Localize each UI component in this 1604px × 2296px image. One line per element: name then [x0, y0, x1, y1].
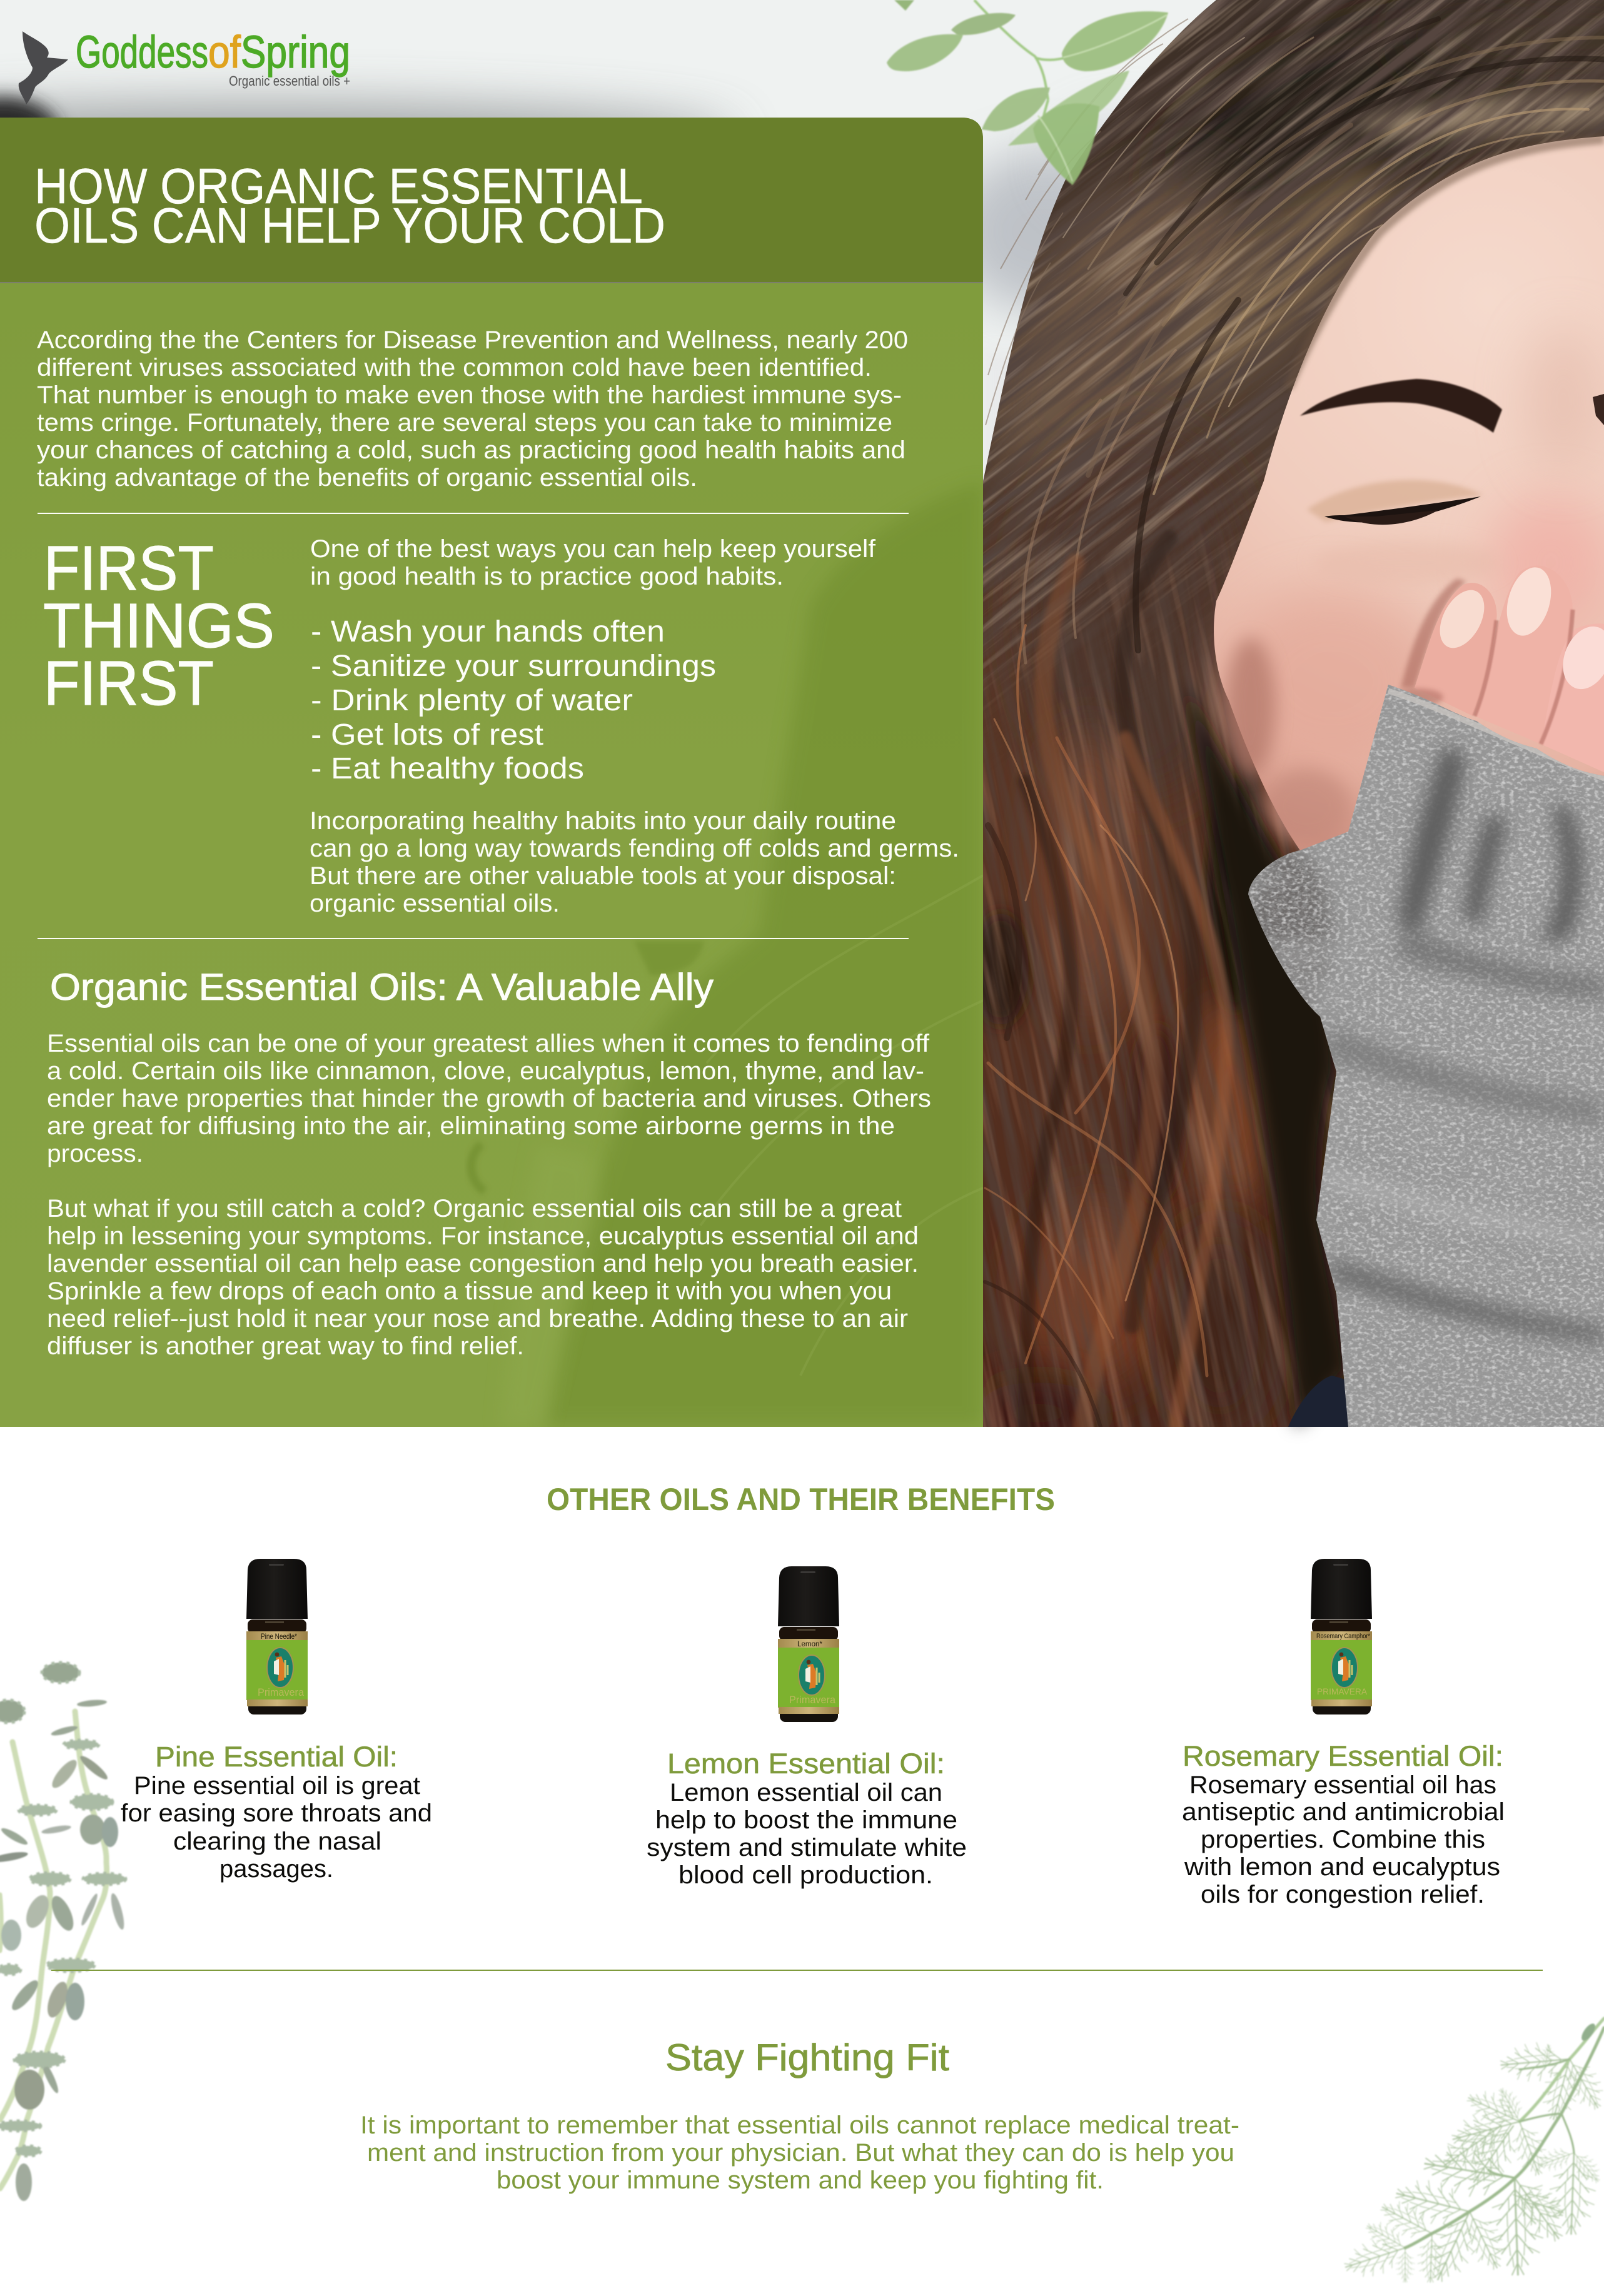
- habits closing paragraph: can go a long way towards fending off colds and germs.: [310, 835, 959, 862]
- logo: Goddess of Spring: of: [208, 28, 241, 78]
- paragraph: oils as allies: a cold. Certain oils like cinnamon, clove, eucalyptus, lemon, thyme, and lav-: [47, 1057, 924, 1085]
- intro paragraph: [37, 326, 908, 491]
- oil card: rosemary: [1182, 1559, 1505, 1908]
- logo: Goddess of Spring: [19, 28, 350, 104]
- navy top collar: [1288, 1376, 1463, 1427]
- hair flyaways at the left edge of the hair: [986, 19, 1188, 425]
- habits list: [311, 615, 716, 785]
- heading: first things first: [43, 533, 275, 718]
- panel: green article panel: [0, 118, 983, 1427]
- oil card: lemon: [647, 1566, 967, 1889]
- title: OILS CAN HELP YOUR COLD: [34, 198, 665, 253]
- habits closing paragraph: Incorporating healthy habits into your daily routine: [310, 807, 896, 835]
- closing paragraph: ment and instruction from your physician. But what they can do is help you: [367, 2139, 1234, 2167]
- lemon oil description: [647, 1779, 967, 1889]
- title: HOW ORGANIC ESSENTIAL: [34, 158, 643, 214]
- habits list: - Wash your hands often: [311, 615, 665, 648]
- paragraph: if you catch a cold: [47, 1195, 919, 1360]
- pine oil bottle: Pine Needle*: [261, 1632, 297, 1641]
- paragraph: oils as allies: ender have properties that hinder the growth of bacteria and viruses. Others: [47, 1085, 931, 1112]
- basil leaf left: [887, 34, 963, 71]
- habits list: - Eat healthy foods: [311, 752, 584, 785]
- photo: woman with sweater covering her nose: [0, 0, 1604, 1434]
- lemon oil bottle: Lemon*: [797, 1639, 822, 1648]
- face: [1214, 136, 1604, 875]
- heading: stay fighting fit: Stay Fighting Fit: [665, 2037, 949, 2078]
- dill sprig at the bottom right: [1340, 2018, 1604, 2288]
- cuff ribbing shadows: [1395, 744, 1604, 1000]
- paragraph: if you catch a cold: But what if you still catch a cold? Organic essential oils can still be a great: [47, 1195, 902, 1222]
- paragraph: oils as allies: are great for diffusing into the air, eliminating some airborne germs in the: [47, 1112, 895, 1140]
- rosemary oil heading: Rosemary Essential Oil:: [1183, 1740, 1503, 1772]
- paragraph: if you catch a cold: help in lessening your symptoms. For instance, eucalyptus essential oil and: [47, 1222, 919, 1250]
- intro paragraph: That number is enough to make even those with the hardiest immune sys-: [37, 381, 902, 409]
- paragraph: if you catch a cold: diffuser is another great way to find relief.: [47, 1332, 524, 1360]
- paragraph: if you catch a cold: lavender essential oil can help ease congestion and help you breath easier.: [47, 1250, 919, 1277]
- heading: first things first: FIRST: [44, 533, 214, 603]
- intro paragraph: taking advantage of the benefits of organic essential oils.: [37, 464, 697, 491]
- pine oil description: for easing sore throats and: [121, 1800, 432, 1827]
- paragraph: oils as allies: [47, 1030, 931, 1167]
- title: [34, 158, 665, 253]
- basil leaf small top: [951, 13, 1016, 35]
- logo wordmark: Goddess: [76, 28, 208, 78]
- rosemary oil bottle: Rosemary Camphor*: [1316, 1633, 1371, 1640]
- lemon oil description: Lemon essential oil can: [670, 1779, 942, 1806]
- basil sprig at the top: [887, 0, 1168, 185]
- photo background: pale misty backdrop: [0, 0, 1604, 1427]
- rosemary oil description: [1182, 1771, 1505, 1908]
- heading: first things first: FIRST: [44, 648, 214, 718]
- paragraph: oils as allies: Essential oils can be one of your greatest allies when it comes to fending off: [47, 1030, 930, 1057]
- habits list: - Sanitize your surroundings: [311, 650, 716, 683]
- dark neck shadow: [1184, 684, 1348, 1427]
- lemon oil bottle: Primavera: [789, 1694, 836, 1706]
- panel body: [0, 118, 983, 1427]
- heading: valuable ally: Organic Essential Oils: A Valuable Ally: [50, 966, 714, 1008]
- habits closing paragraph: [310, 807, 959, 917]
- finger nails: [1431, 583, 1493, 655]
- paragraph: if you catch a cold: need relief--just hold it near your nose and breathe. Adding these to an air: [47, 1305, 908, 1332]
- logo: Goddess of Spring: Spring: [241, 28, 350, 78]
- pine oil heading: Pine Essential Oil:: [155, 1741, 398, 1773]
- intro paragraph: According the the Centers for Disease Prevention and Wellness, nearly 200: [37, 326, 908, 354]
- hair strands: [985, 19, 1604, 1427]
- logo tagline: Organic essential oils +: [229, 73, 350, 89]
- lemon oil description: system and stimulate white: [647, 1834, 967, 1861]
- heading: first things first: THINGS: [43, 591, 275, 661]
- lemon oil description: blood cell production.: [678, 1861, 933, 1889]
- rosemary oil description: Rosemary essential oil has: [1189, 1771, 1496, 1799]
- rosemary oil description: antiseptic and antimicrobial: [1182, 1798, 1505, 1826]
- oil card: pine: [121, 1559, 432, 1883]
- eyebrow: [1300, 379, 1502, 433]
- heading: other oils and their benefits: OTHER OILS AND THEIR BENEFITS: [547, 1482, 1055, 1517]
- pine oil bottle: Primavera: [258, 1686, 305, 1698]
- good habits intro: One of the best ways you can help keep yourself: [310, 535, 876, 563]
- icon: bird silhouette: [19, 31, 68, 104]
- good habits intro: [310, 535, 876, 590]
- thyme sprig at the left: [0, 1663, 127, 2201]
- rosemary oil bottle: [1311, 1559, 1372, 1714]
- pine oil bottle: [246, 1559, 308, 1714]
- lemon oil description: help to boost the immune: [655, 1806, 957, 1834]
- pine oil description: Pine essential oil is great: [134, 1772, 420, 1800]
- closing paragraph: It is important to remember that essential oils cannot replace medical treat-: [360, 2112, 1239, 2139]
- rosemary oil description: properties. Combine this: [1201, 1826, 1485, 1853]
- paragraph: oils as allies: process.: [47, 1140, 143, 1167]
- lemon oil heading: Lemon Essential Oil:: [667, 1748, 945, 1780]
- intro paragraph: tems cringe. Fortunately, there are several steps you can take to minimize: [37, 409, 892, 436]
- panel header band: [0, 118, 983, 283]
- habits list: - Drink plenty of water: [311, 684, 633, 717]
- habits closing paragraph: organic essential oils.: [310, 890, 560, 917]
- basil lower leaves: [982, 88, 1050, 131]
- rosemary oil description: with lemon and eucalyptus: [1184, 1853, 1500, 1881]
- habits closing paragraph: But there are other valuable tools at your disposal:: [310, 862, 896, 890]
- rosemary oil bottle: PRIMAVERA: [1317, 1686, 1368, 1696]
- pine oil description: clearing the nasal: [173, 1828, 381, 1855]
- basil leaf large: [1062, 11, 1168, 71]
- rosemary oil description: oils for congestion relief.: [1201, 1881, 1485, 1908]
- finger shadows on the face: [1401, 578, 1466, 688]
- translucent hair silhouette: [472, 481, 983, 1427]
- closing paragraph: boost your immune system and keep you fighting fit.: [497, 2167, 1104, 2194]
- pine oil description: [121, 1772, 432, 1883]
- wisps of hair crossing the forehead edge: [1288, 139, 1604, 388]
- habits list: - Get lots of rest: [311, 718, 543, 752]
- wavy lower locks: [1122, 538, 1194, 1326]
- paragraph: if you catch a cold: Sprinkle a few drops of each onto a tissue and keep it with you when you: [47, 1277, 892, 1305]
- eyelid: [1307, 480, 1483, 522]
- good habits intro: in good health is to practice good habits.: [310, 563, 784, 590]
- grey knitted sweater: [1219, 682, 1604, 1432]
- pine oil description: passages.: [219, 1855, 333, 1883]
- lemon oil bottle: [778, 1566, 839, 1722]
- fingers: [1393, 562, 1604, 772]
- closing paragraph: [360, 2112, 1239, 2194]
- hair mass: [983, 0, 1604, 1427]
- intro paragraph: different viruses associated with the common cold have been identified.: [37, 354, 872, 381]
- intro paragraph: your chances of catching a cold, such as practicing good health habits and: [37, 436, 905, 464]
- closed eye lashes: [1324, 496, 1481, 523]
